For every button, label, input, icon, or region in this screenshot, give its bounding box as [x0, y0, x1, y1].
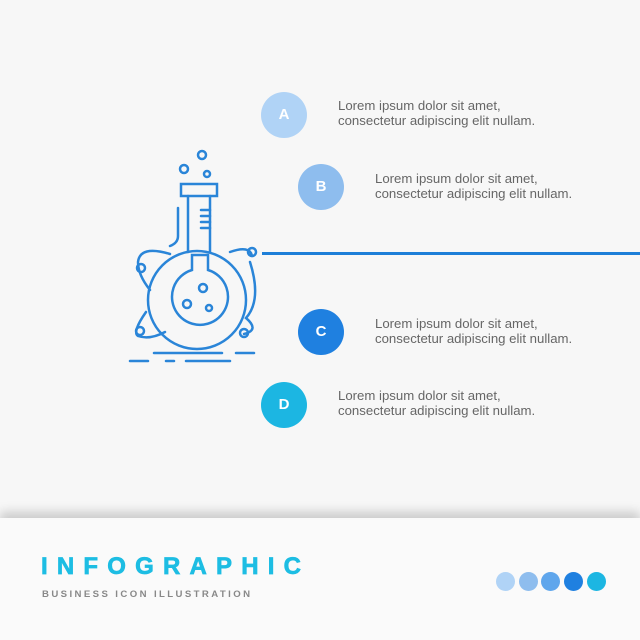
text: consectetur adipiscing elit nullam. [338, 403, 535, 418]
text: B [316, 178, 326, 195]
text: consectetur adipiscing elit nullam. [375, 186, 572, 201]
connector line [262, 252, 640, 255]
text: D [279, 396, 289, 413]
step A [261, 92, 535, 138]
subtitle: BUSINESS ICON ILLUSTRATION [42, 589, 252, 600]
text: consectetur adipiscing elit nullam. [375, 331, 572, 346]
icon: flask with atom [128, 150, 258, 362]
text: Lorem ipsum dolor sit amet, [375, 316, 538, 331]
text: A [279, 106, 289, 123]
step B [298, 164, 572, 210]
color dots [496, 572, 606, 591]
text: Lorem ipsum dolor sit amet, [338, 98, 501, 113]
text: Lorem ipsum dolor sit amet, [338, 388, 501, 403]
text: Lorem ipsum dolor sit amet, [375, 171, 538, 186]
step D [261, 382, 535, 428]
footer shadow band [0, 518, 640, 640]
text: consectetur adipiscing elit nullam. [338, 113, 535, 128]
text: C [316, 323, 326, 340]
step C [298, 309, 572, 355]
title: INFOGRAPHIC [41, 553, 310, 580]
